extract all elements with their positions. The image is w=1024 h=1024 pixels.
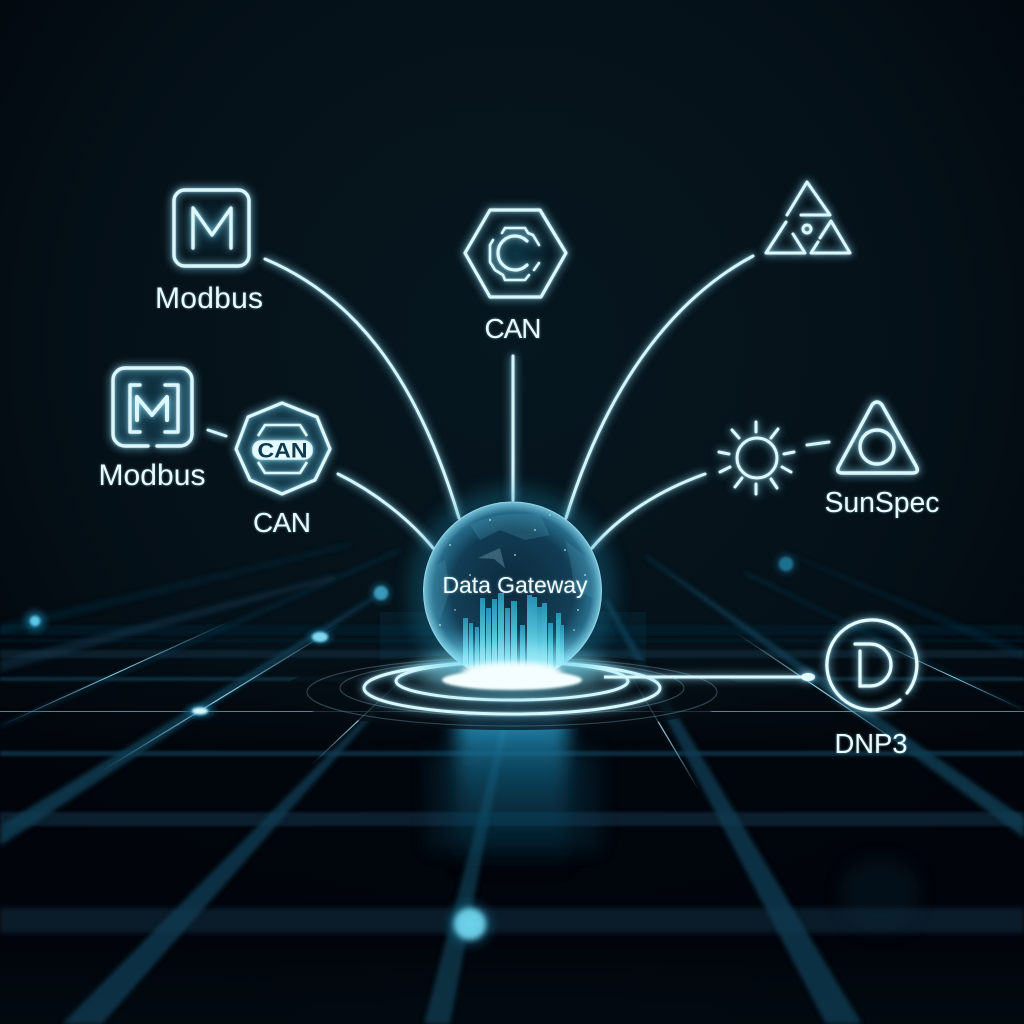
icon: CAN hexagon [465,210,566,297]
label: CAN left: CAN [253,507,311,538]
icon: Modbus square M [174,190,249,266]
label: CAN top: CAN [484,313,542,344]
icon: sun [719,422,794,494]
connector lines to gateway [208,256,829,548]
gateway platform rings [280,654,744,730]
icon: Modbus bracket M [113,368,192,447]
label: Modbus: Modbus [155,282,263,315]
sphere continents [428,514,598,620]
gateway sphere [408,487,616,695]
glowing platform disc [416,650,608,694]
sphere particles [439,514,586,631]
data bars [463,593,564,668]
platform light reflection [380,612,918,930]
glowing floor nodes [19,549,801,954]
label: Modbus secondary: Modbus [98,459,206,492]
label: DNP3: DNP3 [834,728,908,759]
label: SunSpec: SunSpec [824,487,940,519]
icon: CAN octagon [236,403,330,494]
DNP3 connector [604,673,815,681]
icon: triple triangle [766,182,850,253]
icon: CAN octagon: CAN [258,440,308,462]
gateway label: Data Gateway [442,572,588,598]
perspective floor grid [0,543,1024,1024]
icon: DNP3 circle D [827,620,917,710]
icon: SunSpec triangle [838,402,917,473]
